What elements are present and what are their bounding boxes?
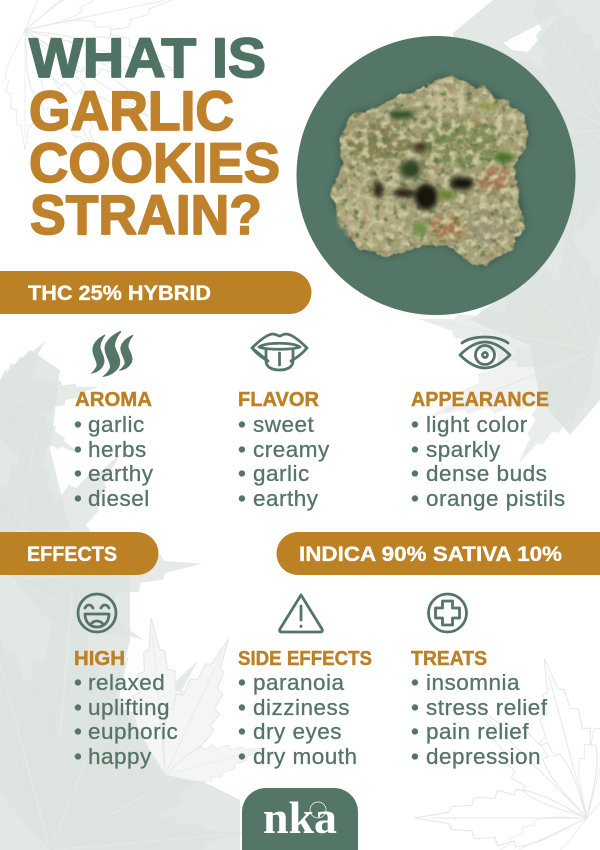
icon: high smiling face — [78, 594, 116, 632]
column: treats: pain relief — [426, 719, 529, 744]
column: side effects: • — [238, 744, 246, 769]
column: treats: • — [411, 719, 419, 744]
column: side effects — [238, 648, 372, 769]
column: high: • — [74, 670, 82, 695]
column: treats — [411, 648, 548, 769]
column: treats: TREATS — [411, 648, 487, 670]
title: COOKIES — [29, 131, 280, 194]
column: aroma: • — [74, 461, 82, 486]
column: appearance: • — [411, 437, 419, 462]
column: aroma — [74, 389, 154, 511]
column: side effects: • — [238, 719, 246, 744]
column: flavor — [238, 389, 330, 511]
column: flavor: garlic — [253, 461, 310, 486]
column: aroma: herbs — [88, 437, 147, 462]
photo: cannabis bud in green circle — [296, 36, 576, 315]
logo badge: nka — [263, 792, 337, 843]
icon: appearance eye — [460, 337, 510, 368]
column: side effects: dizziness — [253, 695, 350, 720]
column: high: uplifting — [88, 695, 170, 720]
column: high: happy — [88, 744, 152, 769]
column: flavor: creamy — [253, 437, 330, 462]
column: treats: insomnia — [426, 670, 520, 695]
column: flavor: • — [238, 461, 246, 486]
column: aroma: AROMA — [75, 389, 152, 411]
title: WHAT IS — [29, 26, 266, 89]
column: side effects: dry eyes — [253, 719, 342, 744]
column: aroma: earthy — [88, 461, 154, 486]
column: flavor: • — [238, 412, 246, 437]
column: treats: • — [411, 744, 419, 769]
icon: treats medical cross — [428, 594, 466, 632]
column: high: HIGH — [74, 648, 125, 670]
column: appearance: sparkly — [426, 437, 501, 462]
column: appearance: • — [411, 461, 419, 486]
pill: effects — [0, 532, 158, 575]
title: STRAIN? — [30, 183, 262, 246]
column: side effects: • — [238, 670, 246, 695]
bud dark hollows and green patches — [373, 103, 514, 235]
column: high: relaxed — [88, 670, 165, 695]
column: treats: depression — [426, 744, 541, 769]
column: high: • — [74, 719, 82, 744]
column: side effects: • — [238, 695, 246, 720]
pill: THC 25% hybrid: THC 25% HYBRID — [28, 282, 211, 305]
icon: side effects warning triangle — [280, 595, 322, 632]
column: appearance: • — [411, 486, 419, 511]
column: appearance — [411, 389, 566, 511]
icon: aroma steam — [92, 331, 133, 376]
column: appearance: APPEARANCE — [411, 389, 549, 411]
column: flavor: FLAVOR — [238, 389, 320, 411]
pill: indica sativa ratio: INDICA 90% SATIVA 10% — [299, 543, 562, 566]
column: aroma: diesel — [88, 486, 150, 511]
column: flavor: • — [238, 437, 246, 462]
column: treats: stress relief — [426, 695, 548, 720]
column: high: • — [74, 744, 82, 769]
column: aroma: • — [74, 437, 82, 462]
column: flavor: earthy — [253, 486, 319, 511]
column: flavor: • — [238, 486, 246, 511]
column: aroma: • — [74, 486, 82, 511]
column: high — [74, 648, 178, 769]
column: appearance: orange pistils — [426, 486, 566, 511]
pill: THC 25% hybrid — [0, 271, 312, 314]
pill: effects: EFFECTS — [27, 543, 117, 566]
title: GARLIC — [29, 79, 234, 142]
icon: flavor lips and tongue — [252, 334, 307, 370]
column: aroma: • — [74, 412, 82, 437]
column: side effects: dry mouth — [253, 744, 358, 769]
column: appearance: • — [411, 412, 419, 437]
column: treats: • — [411, 695, 419, 720]
column: aroma: garlic — [88, 412, 145, 437]
title — [29, 26, 280, 246]
column: treats: • — [411, 670, 419, 695]
pill: indica sativa ratio — [276, 532, 600, 575]
column: side effects: SIDE EFFECTS — [238, 648, 372, 670]
column: high: euphoric — [88, 719, 178, 744]
column: appearance: light color — [426, 412, 528, 437]
column: flavor: sweet — [253, 412, 315, 437]
column: high: • — [74, 695, 82, 720]
column: appearance: dense buds — [426, 461, 547, 486]
column: side effects: paranoia — [253, 670, 345, 695]
logo badge — [242, 788, 358, 850]
